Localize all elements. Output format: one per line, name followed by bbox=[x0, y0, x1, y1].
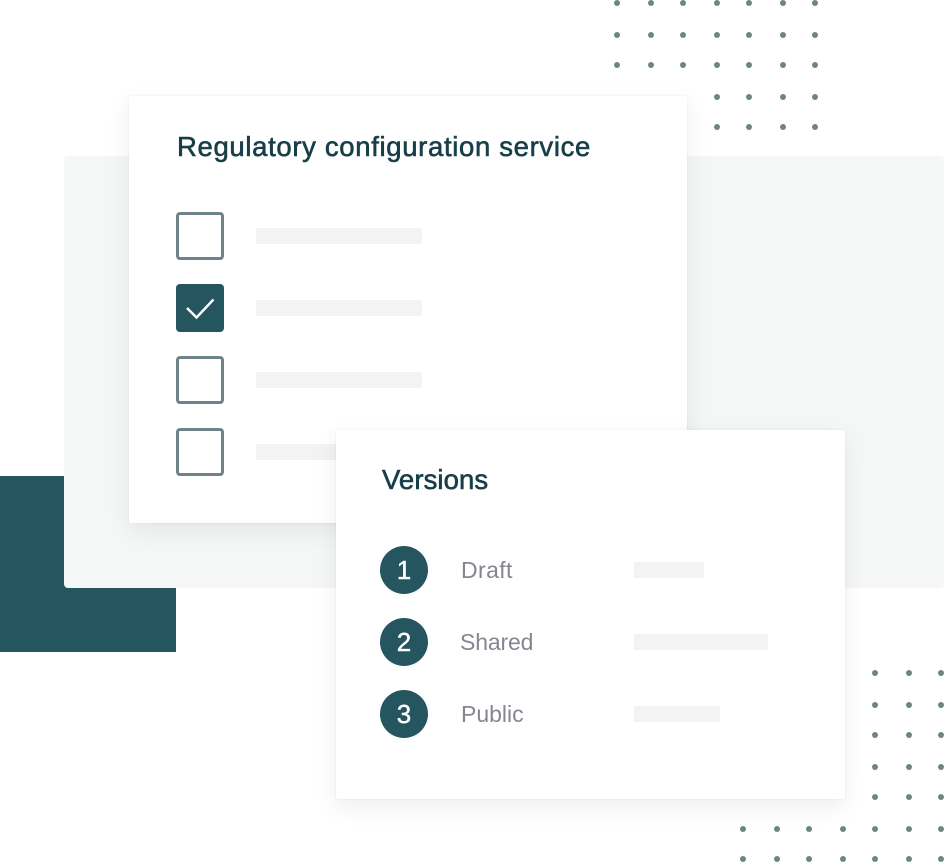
version row 3: public: 3 bbox=[397, 699, 411, 729]
version row 3: public: Public bbox=[461, 701, 524, 727]
version row 1: draft: Draft bbox=[461, 557, 513, 583]
version row 1: draft: 1 bbox=[397, 555, 411, 585]
checkbox row 4 bbox=[176, 428, 336, 476]
checkbox row 2: checked bbox=[176, 284, 422, 332]
version row 1: draft bbox=[380, 546, 704, 594]
checkbox row 1 bbox=[176, 212, 422, 260]
version row 3: public bbox=[380, 690, 720, 738]
background panel bbox=[64, 156, 944, 588]
heading: regulatory configuration service: Regulatory configuration service bbox=[177, 131, 591, 162]
heading: versions: Versions bbox=[382, 464, 488, 495]
panel: versions bbox=[336, 430, 845, 799]
version row 2: shared: Shared bbox=[460, 629, 533, 655]
version row 2: shared: 2 bbox=[397, 627, 411, 657]
teal accent square bbox=[0, 476, 176, 652]
checkbox row 3 bbox=[176, 356, 422, 404]
version row 2: shared bbox=[380, 618, 768, 666]
panel: regulatory configuration service bbox=[129, 96, 687, 523]
